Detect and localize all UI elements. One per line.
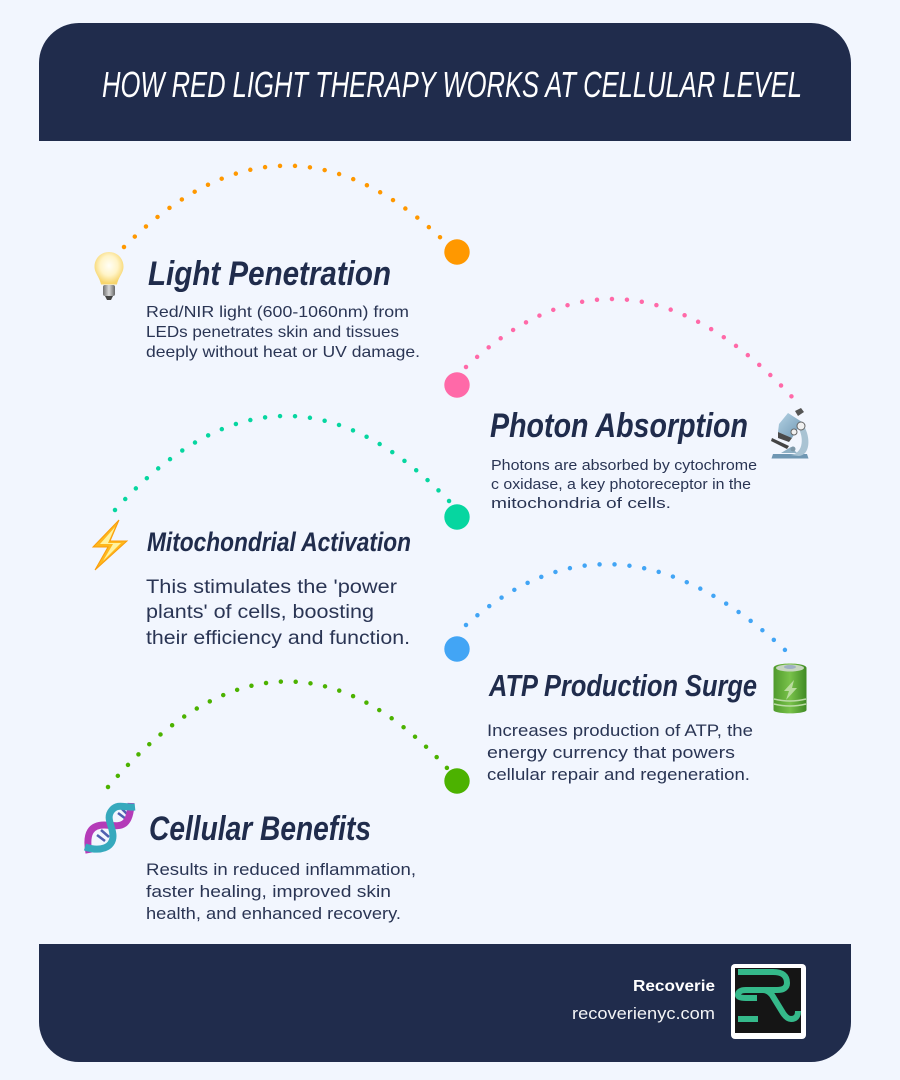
body 2: mitochondria of cells.: [491, 495, 671, 512]
heading 1: Light Penetration: [148, 255, 391, 293]
website: recoverienyc.com: [572, 1005, 715, 1023]
body 3: [146, 576, 410, 649]
node 4: [444, 636, 470, 662]
logo: [731, 964, 806, 1039]
icon: battery: [774, 664, 806, 713]
node 1: [444, 239, 470, 265]
step 4: atp production surge: [444, 564, 806, 784]
dotted arc 2: [466, 299, 793, 398]
body 1: [146, 304, 420, 361]
brand name: Recoverie: [633, 978, 715, 995]
node 2: [444, 372, 470, 398]
dotted arc 1: [124, 166, 443, 247]
body 5: faster healing, improved skin: [146, 882, 391, 901]
body 5: [146, 860, 416, 923]
body 3: plants' of cells, boosting: [146, 601, 374, 623]
header banner: [39, 23, 851, 141]
icon: lightning bolt: [93, 520, 127, 570]
body 4: energy currency that powers: [487, 743, 735, 762]
body 4: [487, 721, 753, 784]
body 2: Photons are absorbed by cytochrome: [491, 457, 757, 474]
body 4: Increases production of ATP, the: [487, 721, 753, 740]
heading 5: Cellular Benefits: [149, 810, 371, 848]
body 5: health, and enhanced recovery.: [146, 904, 401, 923]
body 2: c oxidase, a key photoreceptor in the: [491, 476, 751, 493]
icon: microscope: [771, 408, 808, 458]
dotted arc 3: [115, 416, 450, 510]
body 1: Red/NIR light (600-1060nm) from: [146, 304, 409, 321]
icon: dna helix: [85, 803, 135, 853]
body 3: This stimulates the 'power: [146, 576, 398, 598]
body 4: cellular repair and regeneration.: [487, 765, 750, 784]
node 5: [444, 768, 470, 794]
heading 4: ATP Production Surge: [488, 668, 757, 703]
icon: light bulb: [94, 252, 124, 300]
body 3: their efficiency and function.: [146, 627, 410, 649]
dotted arc 5: [108, 682, 447, 787]
step 2: photon absorption: [444, 299, 808, 512]
heading 2: Photon Absorption: [490, 407, 748, 445]
body 2: [491, 457, 757, 512]
footer banner: [39, 944, 851, 1062]
step 3: mitochondrial activation: [93, 416, 470, 649]
node 3: [444, 504, 470, 530]
body 1: deeply without heat or UV damage.: [146, 344, 420, 361]
body 5: Results in reduced inflammation,: [146, 860, 416, 879]
heading 3: Mitochondrial Activation: [147, 527, 411, 557]
step 1: light penetration: [94, 166, 470, 361]
dotted arc 4: [466, 564, 785, 650]
body 1: LEDs penetrates skin and tissues: [146, 324, 399, 341]
step 5: cellular benefits: [85, 682, 470, 923]
